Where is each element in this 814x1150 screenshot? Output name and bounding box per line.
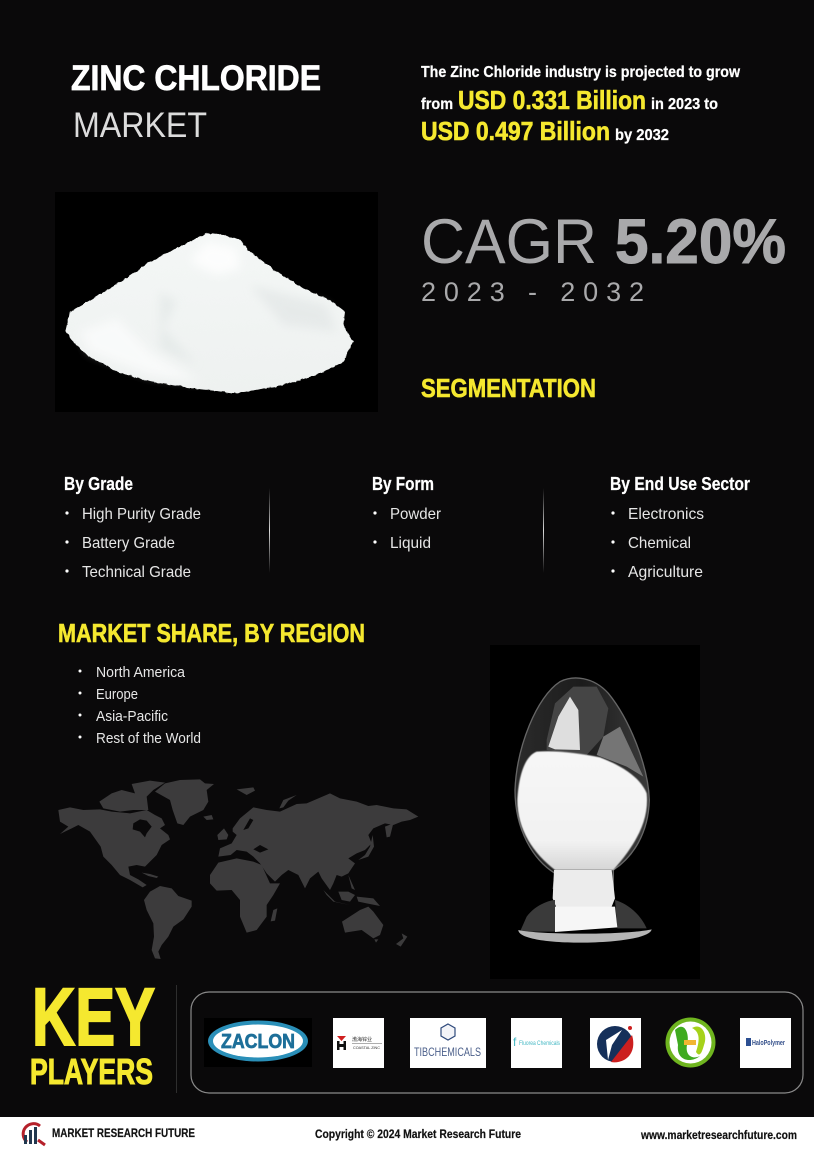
kamchatka side: [385, 823, 393, 837]
segment: by end use sector: [610, 474, 750, 581]
greenland: [155, 779, 214, 825]
icon: market research future logo: [23, 1124, 45, 1145]
market projection text: in 2023 to: [651, 96, 718, 113]
logo: fluorea chemicals: [511, 1018, 562, 1068]
caribbean islands: [142, 873, 158, 878]
south america: [144, 886, 192, 959]
segment: by form: [372, 474, 442, 552]
CAGR headline: [421, 207, 786, 277]
CAGR headline: CAGR: [421, 207, 597, 277]
brand name: MARKET RESEARCH FUTURE: [52, 1126, 195, 1140]
segment: by end use sector: Agriculture: [628, 564, 703, 581]
heading: key players: PLAYERS: [30, 1051, 153, 1092]
novaya zemlya: [279, 795, 297, 808]
north america: [58, 807, 170, 887]
southeast asia islands: [323, 890, 350, 905]
black sea cut: [253, 845, 268, 853]
logo: zaclon: ZACLON: [221, 1031, 295, 1053]
iceland: [203, 815, 213, 820]
market projection text: from: [421, 96, 453, 113]
copyright: Copyright © 2024 Market Research Future: [315, 1127, 521, 1141]
segment: by form: By Form: [372, 474, 434, 494]
world map: [58, 779, 418, 959]
segment: by grade: Battery Grade: [82, 535, 175, 552]
title: ZINC CHLORIDE: [71, 59, 321, 98]
british isles: [217, 828, 228, 840]
region list: [78, 664, 201, 747]
heading: market share by region: MARKET SHARE, BY REGION: [58, 618, 365, 648]
region list: Europe: [96, 686, 138, 703]
region list: North America: [96, 664, 186, 681]
title: MARKET: [73, 106, 207, 145]
segment: by grade: [64, 474, 201, 581]
logo: red blue circle: [590, 1018, 641, 1068]
flask glass: [515, 678, 649, 888]
image: zinc chloride flask: [490, 645, 700, 979]
title: [71, 59, 321, 145]
logo: green h circle: [666, 1018, 716, 1068]
logo: tib chemicals: TIBCHEMICALS: [414, 1045, 481, 1059]
segment: by grade: High Purity Grade: [82, 506, 201, 523]
eurasia: [218, 793, 418, 890]
white powder: [517, 751, 647, 870]
logo: fluorea chemicals: f: [513, 1035, 517, 1049]
australia: [342, 907, 383, 938]
segment: by end use sector: Chemical: [628, 535, 691, 552]
logo: coastal zinc: COASTAL ZINC: [353, 1046, 381, 1050]
CAGR headline: 5.20%: [615, 207, 786, 277]
new zealand: [396, 933, 407, 947]
segment: by end use sector: By End Use Sector: [610, 474, 750, 494]
segment: by end use sector: Electronics: [628, 506, 704, 523]
image: zinc chloride powder pile: [55, 192, 378, 412]
logo: halopolymer: [740, 1018, 791, 1068]
region list: Asia-Pacific: [96, 708, 168, 725]
hudson bay cutout: [133, 819, 152, 837]
logo: tib chemicals: [410, 1018, 486, 1068]
segment: by form: Powder: [390, 506, 442, 523]
africa: [210, 858, 280, 933]
logo: coastal zinc: [333, 1018, 384, 1068]
madagascar: [271, 908, 277, 921]
powder residue inside glass: [547, 687, 608, 755]
arctic islands: [99, 781, 165, 812]
market projection text: USD 0.497 Billion: [421, 116, 610, 146]
market projection text: [421, 64, 741, 146]
CAGR period: 2023 - 2032: [421, 277, 644, 307]
scandinavia cut: [243, 818, 253, 830]
market projection text: USD 0.331 Billion: [458, 85, 646, 115]
heading: key players: KEY: [32, 972, 155, 1063]
logo: coastal zinc: 渤海锌业: [352, 1036, 372, 1043]
segment: by grade: By Grade: [64, 474, 133, 494]
heading: key players: [30, 972, 155, 1092]
japan: [358, 835, 374, 860]
flask base: [520, 900, 647, 932]
flask neck: [553, 870, 617, 932]
segment: by form: Liquid: [390, 535, 431, 552]
logo: halopolymer: HaloPolymer: [752, 1040, 785, 1047]
footer bar: [0, 1117, 814, 1150]
logo: fluorea chemicals: Fluorea Chemicals: [519, 1040, 561, 1047]
heading: segmentation: SEGMENTATION: [421, 373, 596, 403]
region list: Rest of the World: [96, 730, 201, 747]
market projection text: by 2032: [615, 127, 669, 144]
segment: by grade: Technical Grade: [82, 564, 191, 581]
logo: zaclon: [204, 1018, 312, 1067]
market projection text: The Zinc Chloride industry is projected to grow: [421, 64, 741, 81]
panel: key player logos: [191, 992, 803, 1093]
svalbard: [237, 787, 255, 795]
